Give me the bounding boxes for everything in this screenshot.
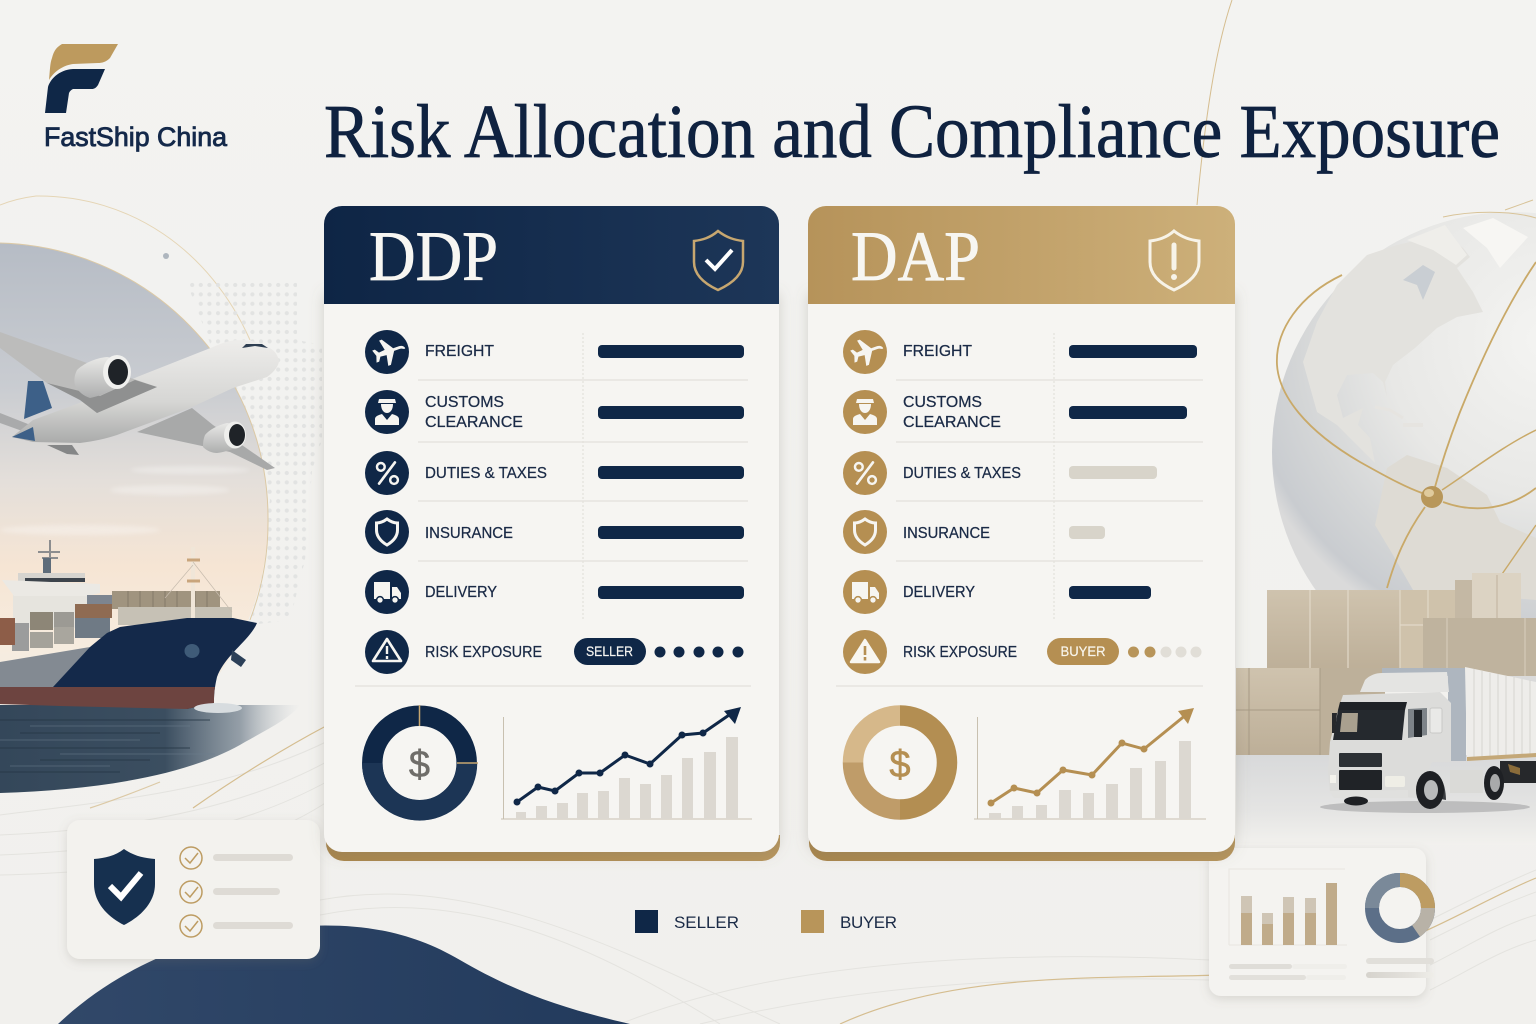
checklist items bbox=[180, 847, 293, 937]
legend bbox=[635, 910, 897, 933]
logo mark bbox=[45, 44, 118, 113]
chassis and wheels bbox=[1450, 770, 1483, 793]
fuselage bbox=[12, 340, 279, 443]
bow wave bbox=[194, 703, 242, 713]
panel: DDP card bbox=[324, 206, 780, 861]
heading DAP: DAP bbox=[851, 218, 980, 296]
bow mast bbox=[191, 547, 195, 620]
placeholder text lines bbox=[1229, 958, 1434, 980]
ship mast and superstructure bbox=[38, 540, 60, 575]
card header bbox=[808, 206, 1235, 304]
row: risk exposure: SELLER bbox=[586, 643, 633, 659]
row: customs clearance: CUSTOMS bbox=[903, 394, 982, 411]
row: duties and taxes bbox=[365, 451, 744, 495]
trailer bbox=[1382, 668, 1465, 676]
red boot topping bbox=[0, 687, 215, 709]
row: freight: FREIGHT bbox=[425, 343, 494, 360]
row: risk exposure: RISK EXPOSURE bbox=[903, 644, 1017, 661]
row: customs clearance bbox=[843, 390, 1187, 434]
row: delivery bbox=[843, 570, 1151, 614]
containers bbox=[112, 591, 220, 609]
row: delivery bbox=[365, 570, 744, 614]
logo text: FastShip China bbox=[44, 122, 227, 152]
legend: seller: SELLER bbox=[674, 913, 739, 932]
ground bbox=[1236, 755, 1536, 845]
row: risk exposure: RISK EXPOSURE bbox=[425, 644, 542, 661]
panel: compliance checklist card bbox=[67, 820, 320, 959]
card body bbox=[808, 290, 1235, 852]
row: duties and taxes: DUTIES & TAXES bbox=[903, 465, 1021, 482]
ground shadow bbox=[1320, 801, 1530, 813]
truck bbox=[1320, 667, 1536, 813]
row: duties and taxes: DUTIES & TAXES bbox=[425, 465, 547, 482]
ship bbox=[0, 540, 257, 709]
row: risk exposure bbox=[843, 630, 1202, 674]
panel: DAP card bbox=[808, 206, 1235, 861]
row: customs clearance bbox=[365, 390, 744, 434]
panel: analytics mini card bbox=[1209, 848, 1434, 996]
card header bbox=[324, 206, 779, 304]
row: freight: FREIGHT bbox=[903, 343, 972, 360]
row: delivery: DELIVERY bbox=[903, 584, 975, 601]
card body bbox=[324, 290, 779, 852]
row: customs clearance: CUSTOMS bbox=[425, 394, 504, 411]
bar and line chart bbox=[501, 707, 752, 819]
far wing bbox=[0, 332, 157, 413]
row: customs clearance: CLEARANCE bbox=[425, 414, 523, 431]
tail fin bbox=[24, 381, 52, 419]
row separators bbox=[836, 333, 1203, 686]
row: duties and taxes bbox=[843, 451, 1157, 495]
navy hull bbox=[53, 618, 257, 709]
continents bbox=[1303, 230, 1483, 463]
donut: DDP cost share: $ bbox=[409, 744, 430, 786]
card lip bbox=[326, 835, 780, 861]
right illustration: globe, boxes and truck bbox=[1236, 200, 1536, 845]
bar and line chart bbox=[974, 708, 1206, 819]
row: risk exposure bbox=[365, 630, 744, 674]
row: delivery: DELIVERY bbox=[425, 584, 497, 601]
donut: DAP cost share: $ bbox=[889, 744, 911, 786]
background patch beside boxes bbox=[1236, 590, 1267, 668]
mini bar chart bbox=[1229, 869, 1347, 945]
cockpit bbox=[242, 344, 268, 348]
row: freight bbox=[843, 330, 1197, 374]
grey hull side bbox=[0, 647, 90, 687]
small dot bbox=[163, 253, 169, 259]
orbit lines bbox=[1277, 200, 1536, 588]
stabilizers bbox=[0, 413, 33, 432]
mini donut bbox=[1372, 880, 1428, 936]
clouds bbox=[9, 468, 236, 534]
dot pattern bbox=[185, 278, 322, 625]
logo bbox=[44, 44, 227, 152]
bottom navy wave bbox=[58, 925, 630, 1024]
near wing bbox=[137, 408, 275, 470]
engine near bbox=[203, 423, 242, 453]
row: insurance bbox=[843, 510, 1105, 554]
row separators bbox=[355, 333, 751, 686]
donut: DDP cost share bbox=[372, 705, 478, 810]
water bbox=[0, 705, 300, 793]
row: insurance: INSURANCE bbox=[425, 525, 513, 542]
heading DDP: DDP bbox=[369, 218, 498, 296]
background contour lines bbox=[0, 740, 1536, 1024]
nose cone of tail bbox=[12, 427, 35, 441]
engine far bbox=[74, 357, 125, 398]
card lip bbox=[809, 835, 1235, 861]
cab bbox=[1328, 692, 1451, 798]
donut: DAP cost share bbox=[853, 716, 947, 810]
legend: seller bbox=[635, 910, 739, 933]
fairing bbox=[1360, 672, 1449, 692]
globe bbox=[1272, 200, 1536, 692]
row: freight bbox=[365, 330, 744, 374]
left photo: plane and ship bbox=[0, 243, 300, 793]
legend: buyer bbox=[801, 910, 897, 933]
icon: shield alert bbox=[1150, 231, 1199, 290]
cargo boxes bbox=[1236, 573, 1536, 755]
gold hub bbox=[1421, 486, 1443, 508]
airplane bbox=[0, 332, 279, 470]
legend: buyer: BUYER bbox=[840, 913, 897, 932]
row: insurance bbox=[365, 510, 744, 554]
sky circle bbox=[0, 243, 268, 793]
icon: shield check bbox=[694, 231, 743, 290]
row: customs clearance: CLEARANCE bbox=[903, 414, 1001, 431]
row: insurance: INSURANCE bbox=[903, 525, 990, 542]
row: risk exposure: BUYER bbox=[1060, 643, 1106, 659]
icon: navy shield with check bbox=[94, 849, 155, 925]
